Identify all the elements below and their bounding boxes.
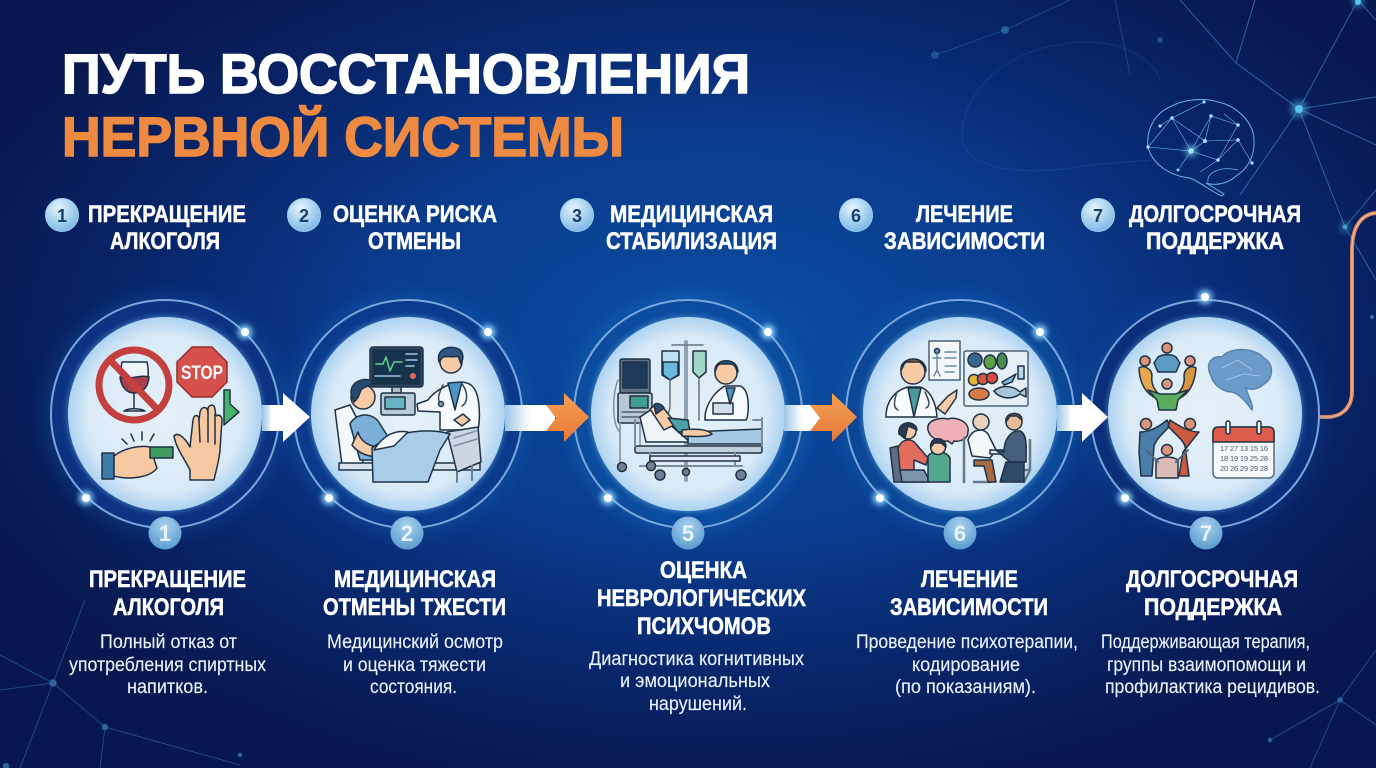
icon: glowing wireframe brain bbox=[1146, 99, 1254, 196]
heading: step 3 bbox=[560, 198, 777, 255]
arrow 3 bbox=[784, 393, 857, 442]
icon: brain bbox=[928, 418, 968, 444]
heading: step 3: 3 bbox=[572, 206, 582, 226]
icon: family on a sofa bbox=[890, 423, 950, 482]
text block: step 1 bbox=[69, 566, 266, 698]
text block: step 2: состояния. bbox=[370, 677, 457, 698]
title: НЕРВНОЙ СИСТЕМЫ bbox=[62, 105, 624, 168]
icon: hand refusing a glass bbox=[102, 432, 173, 479]
heading: step 2: 2 bbox=[299, 206, 309, 226]
icon: patient in bed with doctor bbox=[335, 347, 481, 482]
title bbox=[62, 42, 750, 168]
text block: step 1: Полный отказ от bbox=[100, 632, 237, 653]
text block: step 6: кодирование bbox=[912, 655, 1020, 676]
heading: step 7: ПОДДЕРЖКА bbox=[1146, 228, 1284, 255]
ghost brain outline bbox=[962, 42, 1160, 171]
text block: step 7: ПОДДЕРЖКА bbox=[1144, 594, 1282, 621]
number badge 5: 5 bbox=[682, 521, 694, 546]
arrow 4 bbox=[1057, 393, 1108, 442]
icon: IV stand and drips bbox=[662, 342, 706, 480]
text block: step 1: напитков. bbox=[127, 677, 208, 698]
icon: doctor bbox=[417, 347, 479, 430]
text block: step 7: группы взаимопомощи и bbox=[1107, 655, 1306, 676]
number badge 6 bbox=[944, 516, 976, 550]
icon: bed and patient bbox=[335, 379, 481, 482]
text block: step 5 bbox=[589, 557, 806, 715]
text block: step 6: ЗАВИСИМОСТИ bbox=[890, 594, 1048, 621]
icon: raised open hand bbox=[174, 405, 222, 480]
icon: long-term support bbox=[1139, 343, 1274, 478]
heading: step 1: АЛКОГОЛЯ bbox=[110, 228, 220, 255]
icon: calendar bbox=[1213, 421, 1274, 478]
number badge 5 bbox=[672, 516, 704, 550]
text block: step 5: Диагностика когнитивных bbox=[589, 649, 804, 670]
text block: step 2: ОТМЕНЫ ТЖЕСТИ bbox=[323, 594, 506, 621]
text block: step 2: МЕДИЦИНСКАЯ bbox=[334, 566, 496, 593]
title: ПУТЬ ВОССТАНОВЛЕНИЯ bbox=[62, 42, 750, 105]
icon: addiction treatment team bbox=[886, 341, 1030, 482]
connector: orange line leaving the last circle bbox=[1300, 213, 1376, 417]
icon: therapist and client bbox=[964, 413, 1030, 482]
number badge 7: 7 bbox=[1200, 521, 1212, 546]
neural network pattern: bottom left bbox=[0, 600, 1376, 768]
heading: step 7 bbox=[1082, 198, 1301, 255]
number badge 1 bbox=[148, 516, 182, 550]
text block: step 5: НЕВРОЛОГИЧЕСКИХ bbox=[597, 585, 806, 612]
icon: anatomy chart bbox=[929, 341, 960, 380]
icon: doctor with clipboard bbox=[705, 361, 748, 420]
text block: step 2 bbox=[323, 566, 506, 698]
text block: step 6: ЛЕЧЕНИЕ bbox=[921, 566, 1018, 593]
heading: step 6 bbox=[840, 198, 1045, 255]
circle 1 frame bbox=[45, 294, 285, 534]
icon: bed and patient bbox=[618, 404, 762, 480]
icon: ICU bed with IV and doctor bbox=[614, 342, 762, 480]
text block: step 5: и эмоциональных bbox=[620, 671, 770, 692]
heading: step 2: ОЦЕНКА РИСКА bbox=[333, 201, 497, 228]
number badge 1: 1 bbox=[159, 521, 171, 546]
heading: step 3: МЕДИЦИНСКАЯ bbox=[610, 201, 773, 228]
text block: step 6 bbox=[856, 566, 1078, 698]
arrow 1 bbox=[262, 393, 310, 442]
text block: step 6: (по показаниям). bbox=[895, 677, 1036, 698]
icon: blue brain bbox=[1209, 350, 1272, 410]
neural network pattern: top right bbox=[935, 0, 1376, 280]
text block: step 1: употребления спиртных bbox=[69, 655, 266, 676]
text block: step 2: и оценка тяжести bbox=[343, 655, 486, 676]
icon: prohibition ring bbox=[99, 350, 169, 420]
text block: step 5: ПСИХЧОМОВ bbox=[637, 613, 771, 640]
heading: step 3: СТАБИЛИЗАЦИЯ bbox=[606, 228, 777, 255]
heading: step 1: 1 bbox=[57, 206, 67, 226]
icon: nutrition board bbox=[964, 351, 1028, 406]
number badge 7 bbox=[1190, 516, 1222, 550]
heading: step 6: 6 bbox=[851, 206, 861, 226]
heading: step 6: ЛЕЧЕНИЕ bbox=[916, 201, 1013, 228]
icon: calendar: 18 19 19 25 28 bbox=[1220, 454, 1268, 463]
icon: calendar: 20 26 29 29 28 bbox=[1220, 464, 1268, 473]
number badge 2 bbox=[390, 516, 424, 550]
text block: step 7 bbox=[1101, 566, 1320, 698]
heading: step 1: ПРЕКРАЩЕНИЕ bbox=[88, 201, 246, 228]
text block: step 7: ДОЛГОСРОЧНАЯ bbox=[1126, 566, 1298, 593]
text block: step 1: ПРЕКРАЩЕНИЕ bbox=[89, 566, 246, 593]
number badge 6: 6 bbox=[954, 521, 966, 546]
heading: step 6: ЗАВИСИМОСТИ bbox=[884, 228, 1045, 255]
icon: green flag bbox=[224, 390, 239, 425]
icon: wine glass bbox=[120, 362, 149, 411]
circle 4 frame bbox=[840, 294, 1080, 534]
heading: step 7: ДОЛГОСРОЧНАЯ bbox=[1129, 201, 1301, 228]
heading: step 7: 7 bbox=[1093, 206, 1103, 226]
icon: stop sign: STOP bbox=[181, 363, 223, 384]
circle 2 frame bbox=[288, 294, 528, 534]
text block: step 5: нарушений. bbox=[649, 694, 747, 715]
icon: community group bbox=[1139, 418, 1199, 478]
text block: step 5: ОЦЕНКА bbox=[660, 557, 747, 584]
text block: step 7: профилактика рецидивов. bbox=[1105, 677, 1320, 698]
icon: ventilator monitor bbox=[614, 359, 652, 470]
text block: step 1: АЛКОГОЛЯ bbox=[113, 594, 224, 621]
text block: step 6: Проведение психотерапии, bbox=[856, 632, 1078, 653]
heading: step 2 bbox=[288, 198, 497, 255]
icon: support circle of people bbox=[1139, 343, 1196, 410]
icon: calendar: 17 27 13 15 16 bbox=[1220, 444, 1268, 453]
arrow 2 bbox=[505, 393, 589, 442]
text block: step 2: Медицинский осмотр bbox=[327, 632, 503, 653]
heading: step 1 bbox=[46, 198, 246, 255]
text block: step 7: Поддерживающая терапия, bbox=[1101, 632, 1310, 653]
icon: doctor bbox=[886, 359, 957, 417]
circle 5 frame bbox=[1085, 290, 1325, 534]
icon: vitals monitor bbox=[370, 347, 423, 415]
heading: step 2: ОТМЕНЫ bbox=[368, 228, 461, 255]
circle 3 frame bbox=[568, 294, 808, 534]
number badge 2: 2 bbox=[401, 521, 413, 546]
neural network nodes bbox=[931, 0, 1374, 319]
icon: no alcohol and stop signs bbox=[99, 347, 239, 480]
